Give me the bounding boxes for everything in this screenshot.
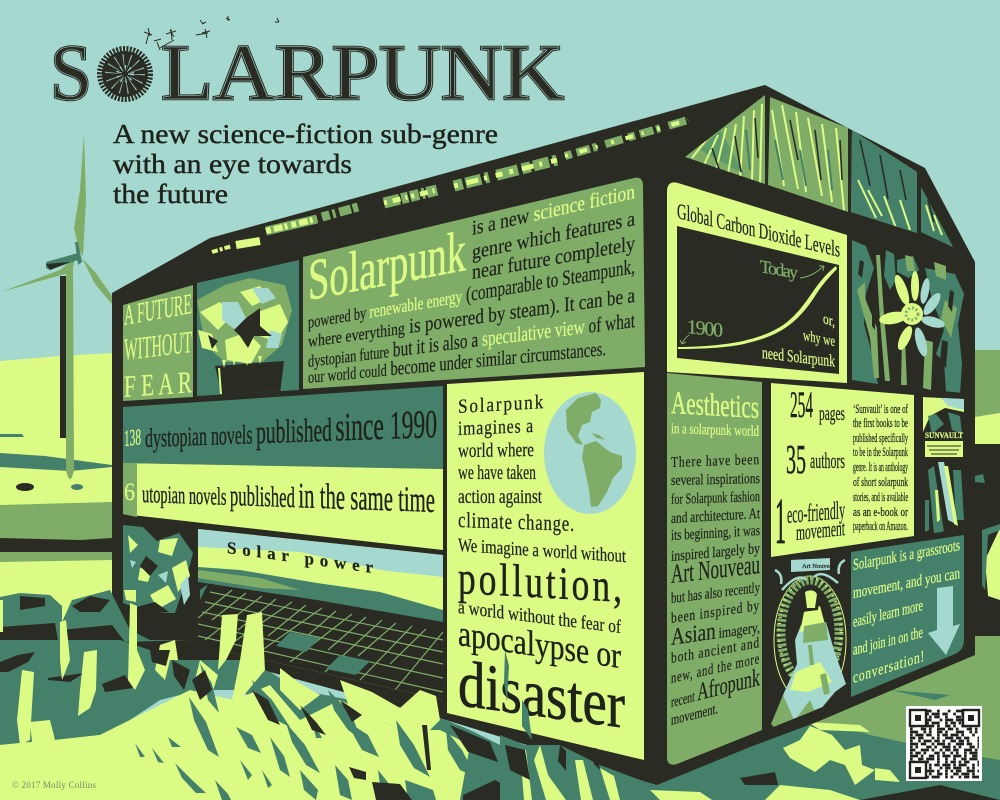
panel: sunvault stats: stories, and is available (853, 490, 908, 504)
icon: dandelion (100, 16, 279, 99)
panel: sunvault stats: the first books to be (853, 416, 908, 430)
panel: solarpunk definition: genre which features a (472, 206, 635, 264)
panel: utopian novels stat: utopian novels published in the same time (142, 470, 435, 520)
panel: dystopian novels stat (123, 386, 443, 469)
panel: co2 chart: Today (760, 256, 798, 283)
panel: solarpunk definition: is a new science fiction (472, 179, 635, 240)
panel: solarpunk imagines: a world without the fear of (458, 597, 622, 638)
panel: sunvault stats: genre. It is an anthology (853, 460, 908, 474)
panel: sunvault stats: ‘Sunvault’ is one of (853, 402, 908, 416)
panel: grassroots call to action (851, 535, 964, 697)
panel: solarpunk definition: our world could become under similar circumstances. (308, 338, 606, 388)
subtitle (113, 119, 498, 209)
panel: co2 chart: why we (803, 328, 835, 350)
panel: sunvault stats: 1 (775, 485, 786, 558)
roof windows (212, 120, 688, 252)
panel: solarpunk definition: Solarpunk (308, 218, 466, 313)
panel: aesthetics: and architecture. At (671, 506, 761, 527)
panel: art nouveau poster: Art Nouveau (802, 563, 837, 570)
panel: aesthetics: recent Afropunk (671, 663, 760, 713)
solarpunk infographic: WITHOUT (124, 324, 192, 367)
panel: solarpunk imagines: pollution, (458, 552, 625, 612)
panel: grassroots call to action: easily learn more (853, 596, 923, 631)
panel: co2 chart: need Solarpunk (762, 343, 835, 371)
panel: solar power photo: Solar power (227, 538, 373, 577)
panel: co2 chart: or, (823, 310, 835, 331)
panel: aesthetics: but has also recently (671, 580, 760, 607)
panel: aesthetics: both ancient and (671, 635, 760, 667)
panel: aesthetics: Aesthetics (671, 384, 759, 425)
panel: solarpunk imagines: world where (458, 439, 534, 462)
greenhouse frame (112, 85, 975, 785)
panel: solarpunk definition: dystopian future but it is also a speculative view of what (308, 308, 635, 372)
icon: daisy (878, 271, 946, 358)
panel: small plant photo (123, 525, 193, 613)
panel: plant photo (197, 260, 299, 396)
panel: aesthetics: new, and the more (671, 650, 760, 687)
panel: solarpunk imagines: imagines a (458, 415, 534, 440)
panel: sunvault stats: movement (796, 515, 845, 545)
panel: a future without fear (123, 285, 193, 404)
panel: utopian novels stat (123, 463, 443, 550)
title: LARPUNK (161, 30, 564, 117)
panel: aesthetics: its beginning, it was (671, 523, 760, 544)
panel: co2 chart: 1900 (687, 316, 723, 342)
subtitle: the future (113, 179, 228, 209)
grass foreground (0, 590, 660, 800)
panel: aesthetics: Art Nouveau (671, 549, 760, 589)
panel: solarpunk definition (303, 178, 645, 389)
panel: solarpunk definition: powered by renewable energy (comparable to Steampunk, (308, 254, 635, 333)
panel: dystopian novels stat: dystopian novels published since 1990 (145, 401, 437, 456)
panel: sunvault stats: of short solarpunk (853, 475, 908, 489)
panel: aesthetics: There have been (671, 452, 760, 471)
panel: aesthetics: inspired largely by (671, 541, 760, 565)
title: LARPUNK (161, 30, 564, 117)
solarpunk infographic: A FUTURE (124, 288, 192, 332)
panel: solarpunk imagines: Solarpunk (458, 391, 545, 418)
panel: solarpunk imagines: disaster (458, 647, 625, 743)
title: S (50, 30, 92, 117)
panel: sunvault stats: as an e-book or (853, 505, 909, 519)
panel: sunvault stats: published specifically (853, 431, 908, 445)
panel: grassroots call to action: conversation! (853, 646, 925, 687)
panel: sunvault stats: pages (819, 401, 845, 425)
icon: down arrow (928, 586, 960, 655)
icon: globe (544, 392, 636, 514)
panel: sunvault stats (771, 383, 914, 558)
panel: aesthetics: for Solarpunk fashion (671, 489, 760, 508)
panel: solarpunk definition: near future completely (472, 231, 635, 284)
panel: solarpunk imagines: action against (458, 486, 542, 508)
panel: sunvault stats: 254 (790, 385, 813, 426)
panel: solarpunk imagines: apocalypse or (458, 613, 621, 676)
panel: aesthetics: in a solarpunk world (671, 421, 759, 440)
background hills and ground (0, 300, 1000, 800)
panel: sunvault cover: SUNVAULT (925, 431, 964, 440)
panel: co2 chart (667, 182, 847, 383)
gable windows (680, 90, 960, 250)
panel: sunvault stats: to be in the Solarpunk (853, 445, 908, 459)
panel: aesthetics: movement. (671, 700, 718, 729)
panel: grassroots call to action: and join in on the (853, 623, 923, 659)
panel: sunvault cover (923, 397, 964, 534)
panel: solarpunk imagines: We imagine a world without (458, 535, 627, 567)
panel: aesthetics (667, 373, 762, 765)
panel: dystopian novels stat: 138 (124, 423, 141, 451)
panel: utopian novels stat: 6 (124, 479, 135, 506)
panel: flower photo (850, 235, 966, 395)
panel: solarpunk definition: where everything is powered by steam). It can be a (308, 283, 636, 352)
panel: solarpunk imagines (447, 372, 644, 760)
panel: solarpunk imagines: climate change. (458, 507, 575, 536)
panel: sunvault stats: paperback on Amazon. (853, 519, 908, 533)
qr code (906, 706, 982, 781)
panel: solarpunk imagines: we have taken (458, 462, 536, 484)
panel: solar power photo (195, 525, 445, 705)
panel: sunvault stats: 35 (786, 436, 806, 482)
wind turbine (1, 133, 112, 479)
panel: aesthetics: been inspired by (671, 598, 760, 627)
title: S (50, 30, 92, 117)
panel: aesthetics: several inspirations (671, 471, 760, 489)
panel: art nouveau poster (771, 558, 846, 727)
copyright: © 2017 Molly Collins (12, 780, 96, 790)
subtitle: A new science-fiction sub-genre (113, 119, 498, 149)
subtitle: with an eye towards (113, 149, 352, 179)
panel: a future without fear: F E A R (124, 364, 192, 404)
panel: aesthetics: Asian imagery, (671, 612, 760, 651)
panel: sunvault stats: eco-friendly (787, 497, 845, 529)
panel: co2 chart: Global Carbon Dioxide Levels (677, 198, 840, 262)
panel: sunvault stats: authors (810, 448, 845, 473)
